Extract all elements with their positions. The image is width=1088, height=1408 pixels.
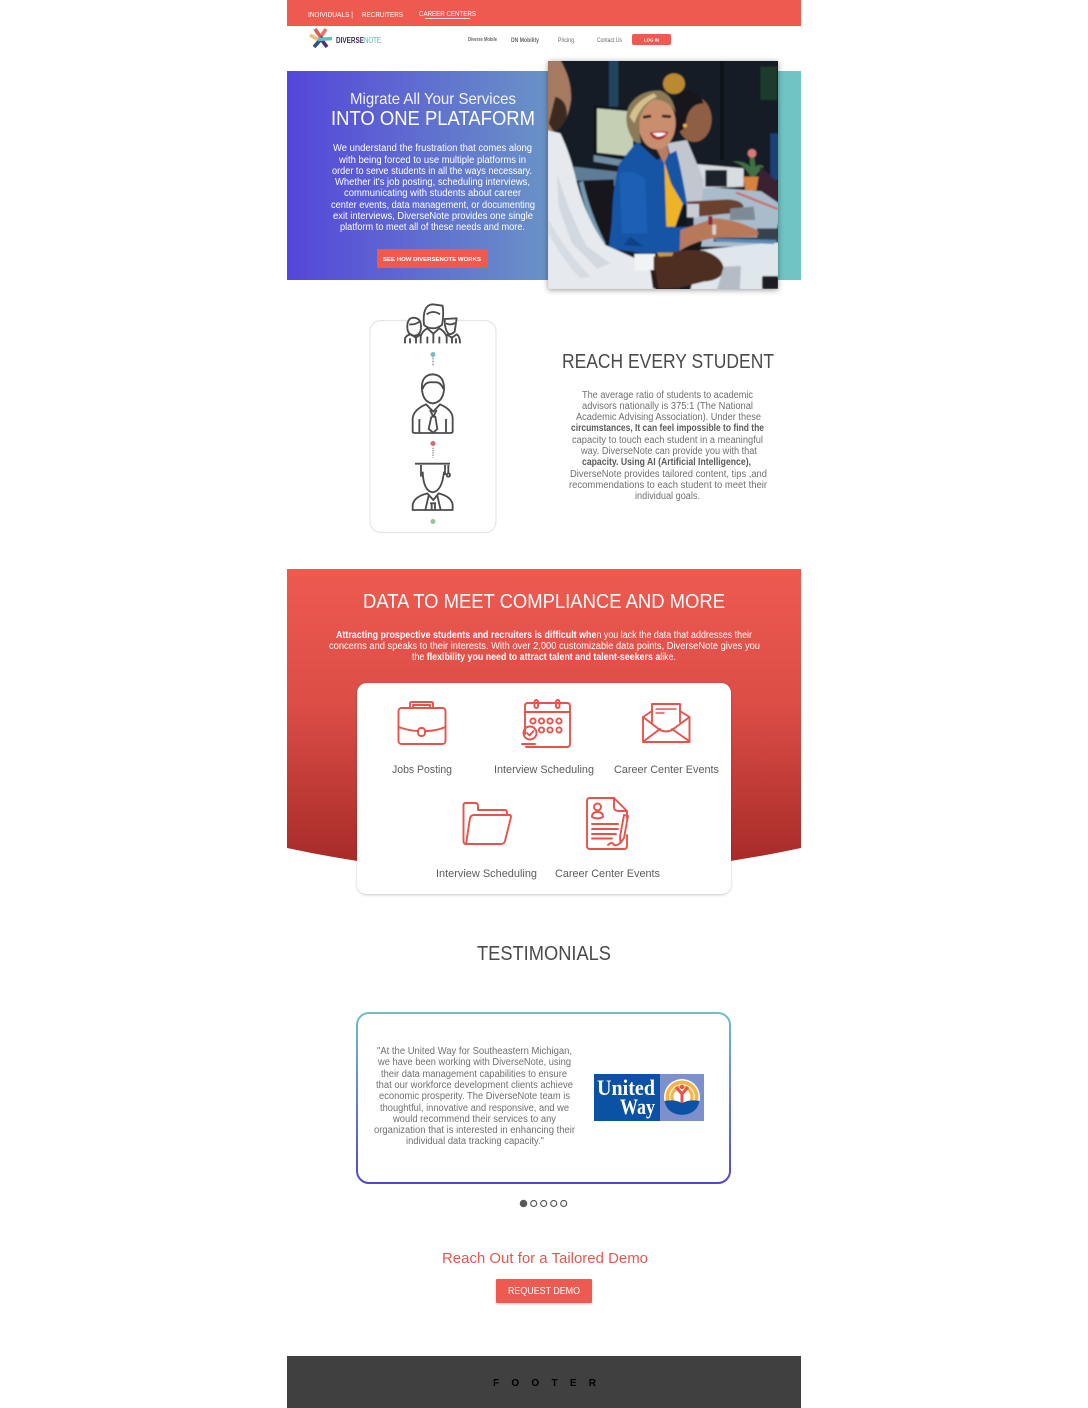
plant xyxy=(743,177,759,191)
hero heading: Migrate All Your Services xyxy=(350,91,516,108)
text block: reach every student: Academic Advising Association). Under these xyxy=(576,412,762,423)
footer xyxy=(287,1356,801,1408)
top navigation bar: CAREER CENTERS xyxy=(419,11,476,18)
hero panel xyxy=(287,71,801,280)
second woman xyxy=(666,139,704,204)
feature: resume career center events: Career Center Events xyxy=(555,868,660,880)
testimonial quote: we have been working with DiverseNote, using xyxy=(377,1057,571,1068)
icon: advisor with tie xyxy=(413,374,453,433)
feature: jobs posting: Jobs Posting xyxy=(392,764,452,776)
feature: career center events: Career Center Events xyxy=(614,764,719,776)
panel: features card xyxy=(357,683,731,894)
main navigation: Diverse Mobile xyxy=(468,37,497,43)
feature: interview scheduling: Interview Scheduling xyxy=(494,764,594,776)
feature: resume career center events xyxy=(555,798,660,880)
laptop xyxy=(730,207,755,220)
heading: data to meet compliance: DATA TO MEET COMPLIANCE AND MORE xyxy=(363,591,725,613)
text block: reach every student: DiverseNote provides tailored content, tips ,and xyxy=(570,469,767,480)
footer: F O O T E R xyxy=(493,1378,597,1389)
hero body text: with being forced to use multiple platforms in xyxy=(338,155,526,166)
hero heading xyxy=(331,91,535,130)
feature: jobs posting xyxy=(392,702,452,776)
text block: reach every student: individual goals. xyxy=(635,491,700,502)
main navigation: DN Mobility xyxy=(511,38,540,44)
hero heading: INTO ONE PLATAFORM xyxy=(331,108,535,130)
blue jacket woman xyxy=(684,240,703,250)
text block: reach every student: advisors nationally is 375:1 (The National xyxy=(582,401,753,412)
text block: reach every student: circumstances, It can feel impossible to find the xyxy=(571,423,764,434)
text block: data section intro xyxy=(329,630,760,663)
testimonial quote: "At the United Way for Southeastern Michigan, xyxy=(377,1046,572,1057)
text block: reach every student: The average ratio of students to academic xyxy=(582,390,753,401)
hero photo: team at computers xyxy=(547,60,779,290)
feature: career center events xyxy=(614,704,719,776)
top navigation bar xyxy=(287,0,801,26)
hero body text: exit interviews, DiverseNote provides one single xyxy=(333,211,533,222)
request demo button xyxy=(496,1279,592,1303)
logo: United Way: Way xyxy=(620,1094,655,1119)
logo: DiverseNote: DIVERSE xyxy=(336,36,365,45)
hero button xyxy=(377,249,488,268)
testimonial quote: thoughtful, innovative and responsive, and we xyxy=(380,1103,570,1114)
feature: folder interview scheduling: Interview Scheduling xyxy=(436,868,537,880)
hero body text: center events, data management, or documenting xyxy=(331,200,535,211)
call to action heading: Reach Out for a Tailored Demo xyxy=(442,1250,648,1267)
text block: data section intro: concerns and speaks to their interests. With over 2,000 customizable data points, DiverseNote gives you xyxy=(329,641,760,652)
text block: reach every student: way. DiverseNote can provide you with that xyxy=(580,446,757,457)
hero body text: We understand the frustration that comes along xyxy=(333,143,532,154)
heading: testimonials: TESTIMONIALS xyxy=(477,943,611,965)
top navigation bar: RECRUITERS xyxy=(362,12,403,19)
text block: reach every student: recommendations to each student to meet their xyxy=(569,480,768,491)
testimonial quote: their data management capabilities to ensure xyxy=(381,1069,568,1080)
hero body text: order to serve students in all the ways necessary. xyxy=(332,166,532,177)
testimonial quote: organization that is interested in enhancing their xyxy=(374,1125,576,1136)
hero body text: communicating with students about career xyxy=(344,188,522,199)
logo: United Way xyxy=(594,1074,704,1121)
hero body text: Whether it's job posting, scheduling interviews, xyxy=(335,177,530,188)
main navigation: Contact Us xyxy=(597,38,622,44)
panel: testimonial card xyxy=(357,1013,730,1183)
feature: folder interview scheduling xyxy=(436,803,537,880)
logo: DiverseNote xyxy=(310,29,381,47)
main navigation: Pricing xyxy=(558,38,574,44)
hero body text xyxy=(331,143,535,233)
text block: reach every student: capacity. Using AI (Artificial Intelligence), xyxy=(582,457,751,468)
page canvas xyxy=(287,0,801,1408)
text block: reach every student: capacity to touch each student in a meaningful xyxy=(572,435,763,446)
top navigation bar: INDIVIDUALS | xyxy=(308,12,353,19)
testimonial quote: individual data tracking capacity." xyxy=(406,1136,545,1147)
man foreground xyxy=(547,130,655,290)
hero button: SEE HOW DIVERSENOTE WORKS xyxy=(383,257,481,263)
carousel dots xyxy=(520,1200,567,1207)
text block: reach every student xyxy=(569,390,768,502)
panel: student journey card xyxy=(370,304,496,532)
panel: data section background xyxy=(287,569,801,876)
logo: DiverseNote: NOTE xyxy=(364,36,381,45)
testimonial quote: economic prosperity. The DiverseNote team is xyxy=(379,1091,570,1102)
icon: graduate with cap xyxy=(413,464,453,510)
testimonial quote xyxy=(374,1046,576,1147)
text block: data section intro: the flexibility you need to attract talent and talent-seekers alike. xyxy=(412,652,676,663)
text block: data section intro: Attracting prospective students and recruiters is difficult when you lack the data that addresses their xyxy=(336,630,753,641)
request demo button: REQUEST DEMO xyxy=(508,1286,580,1297)
hero body text: platform to meet all of these needs and more. xyxy=(340,222,525,233)
heading: reach every student: REACH EVERY STUDENT xyxy=(562,351,774,373)
testimonial quote: that our workforce development clients achieve xyxy=(376,1080,574,1091)
logo: United Way: United xyxy=(597,1075,655,1100)
testimonial quote: would recommend their services to any xyxy=(392,1114,556,1125)
main navigation xyxy=(468,34,671,45)
feature: interview scheduling xyxy=(494,700,594,776)
icon: group of people xyxy=(405,304,460,343)
main navigation: LOG IN xyxy=(644,38,659,44)
